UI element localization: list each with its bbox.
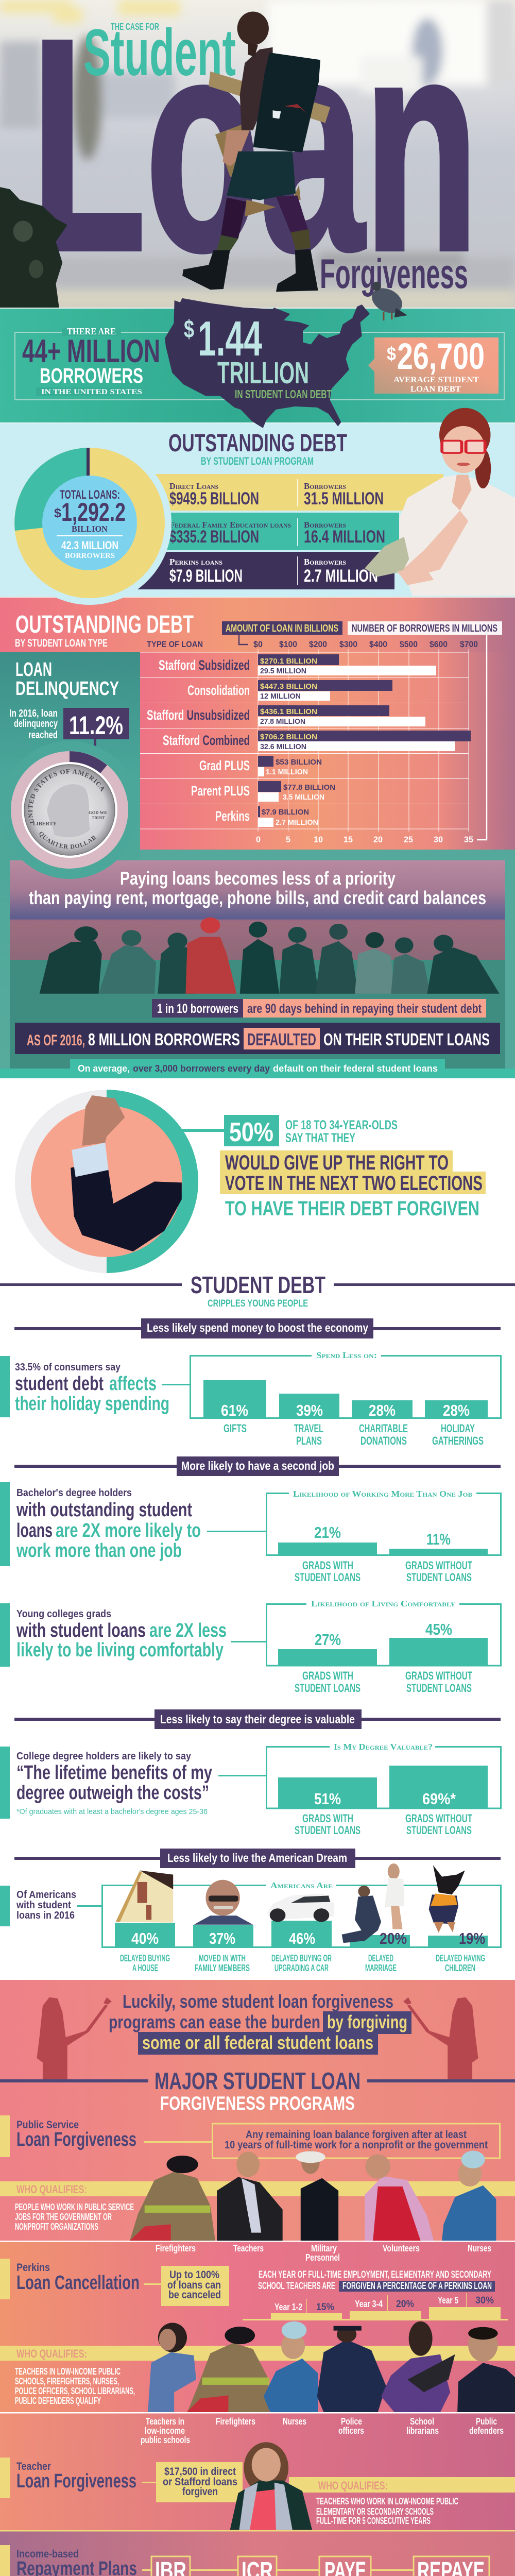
bottom axis bbox=[256, 835, 473, 844]
stat: borrowers: IN THE UNITED STATES bbox=[41, 388, 142, 396]
heading: outstanding debt by type: OUTSTANDING DEBT bbox=[15, 611, 194, 638]
photo: smiling teacher bbox=[230, 2442, 312, 2530]
heading: OUTSTANDING DEBT bbox=[168, 430, 347, 457]
text block: luckily some programs: some or all federal student loans bbox=[142, 2032, 373, 2053]
photo caption: Paying loans becomes less of a priority bbox=[120, 868, 396, 889]
panel: loan delinquency: reached bbox=[28, 730, 58, 741]
section: living comfortably: likely to be living comfortably bbox=[16, 1639, 224, 1661]
program: public service loan forgiveness: Nurses bbox=[468, 2243, 491, 2253]
plan: PAYE bbox=[317, 2556, 373, 2576]
callout: 8 million defaulted: DEFAULTED bbox=[247, 1030, 316, 1049]
chart: working more than one job: 21% bbox=[314, 1523, 341, 1541]
map: United States debt total: TRILLION bbox=[217, 356, 309, 390]
panel: forgiveness programs background bbox=[0, 1980, 515, 2576]
bar: direct loans: Borrowers bbox=[304, 481, 346, 491]
row: Perkins: $7.9 BILLION bbox=[262, 808, 309, 817]
chart: Americans are delaying: DELAYED bbox=[368, 1953, 393, 1963]
row: Parent PLUS: 3.5 MILLION bbox=[283, 793, 324, 802]
chart: donut total loans bbox=[8, 441, 171, 605]
photo: roadside bush bbox=[0, 187, 67, 308]
bar: perkins loans: 2.7 MILLION bbox=[304, 566, 378, 586]
chart: working more than one job: GRADS WITHOUT bbox=[405, 1559, 472, 1572]
program: public service loan forgiveness: Firefighters bbox=[156, 2243, 196, 2253]
program: teacher loan forgiveness: Loan Forgiveness bbox=[16, 2470, 136, 2492]
bar: federal family education loans: Federal Family Education loans bbox=[169, 520, 291, 530]
stat: 50% would give up voting bbox=[182, 1115, 486, 1220]
stat frame bbox=[15, 332, 504, 400]
section: American dream bbox=[0, 1849, 501, 1973]
chart: spend less on: PLANS bbox=[296, 1434, 322, 1447]
legend: AMOUNT OF LOAN IN BILLIONS bbox=[226, 623, 338, 634]
icon: quarter coin with ring: TRUST bbox=[92, 816, 106, 820]
section: American dream: with student bbox=[16, 1900, 71, 1911]
chart: working more than one job bbox=[267, 1489, 501, 1584]
row: Perkins bbox=[215, 806, 318, 827]
program: teacher loan forgiveness: Teacher bbox=[16, 2461, 51, 2472]
plan: ICR bbox=[225, 2556, 290, 2576]
section: second job bbox=[0, 1456, 501, 1584]
map: United States debt total: 1.44 bbox=[198, 311, 262, 366]
chart: is my degree valuable bbox=[267, 1742, 501, 1837]
icon: quarter coin with ring bbox=[11, 745, 128, 879]
panel: outstanding debt by program bbox=[0, 422, 515, 597]
program: public service loan forgiveness: JOBS FOR THE GOVERNMENT OR bbox=[15, 2212, 112, 2222]
chart: spend less on: 28% bbox=[443, 1401, 470, 1419]
program: Perkins loan cancellation: low-income bbox=[145, 2426, 185, 2436]
panel: loan delinquency: In 2016, loan bbox=[9, 708, 58, 719]
photo: older man bbox=[194, 1880, 253, 1925]
chart: Americans are delaying: DELAYED BUYING OR bbox=[271, 1953, 332, 1963]
chart: spend less on: TRAVEL bbox=[294, 1422, 323, 1435]
stat: borrowers bbox=[22, 326, 160, 396]
bar: federal family education loans: Borrowers bbox=[304, 520, 346, 530]
callout: 1 in 10 borrowers bbox=[152, 999, 486, 1018]
section: degree value bbox=[0, 1709, 501, 1837]
heading: outstanding debt by type bbox=[15, 611, 194, 649]
chart: living comfortably: Likelihood of Living Comfortably bbox=[311, 1599, 455, 1608]
program: teacher loan forgiveness: or Stafford loans bbox=[163, 2476, 237, 2488]
program: Perkins loan cancellation: Teachers in bbox=[146, 2416, 184, 2427]
program: income-based repayment plans: Income-based bbox=[16, 2548, 79, 2560]
section: second job: More likely to have a second job bbox=[181, 1459, 334, 1472]
chart: donut total loans: $ bbox=[54, 506, 61, 520]
chart: living comfortably: GRADS WITHOUT bbox=[405, 1669, 472, 1682]
row: Stafford Unsubsidized: 27.8 MILLION bbox=[260, 717, 305, 726]
chart: living comfortably: 27% bbox=[315, 1631, 341, 1649]
callout: 3,000 borrowers every day bbox=[0, 1059, 515, 1078]
plan: REPAYE bbox=[414, 2556, 489, 2576]
row: Stafford Combined: $706.2 BILLION bbox=[260, 733, 317, 741]
row: Stafford Combined bbox=[163, 731, 471, 751]
photo: woman holding cash bbox=[365, 408, 515, 596]
stat: average debt: $ bbox=[387, 343, 396, 364]
bottom axis: 0 bbox=[256, 835, 261, 844]
bottom axis: 15 bbox=[344, 835, 353, 844]
program: Perkins loan cancellation: public schools bbox=[141, 2435, 190, 2445]
map: United States debt total: $ bbox=[184, 316, 194, 343]
hero: title photo panel bbox=[0, 0, 515, 309]
chart: is my degree valuable: 69%* bbox=[422, 1790, 456, 1808]
program: teacher loan forgiveness: ELEMENTARY OR SECONDARY SCHOOLS bbox=[316, 2506, 434, 2517]
bar: perkins loans bbox=[127, 552, 394, 589]
panel: national debt stats bbox=[0, 308, 515, 422]
chart: living comfortably: STUDENT LOANS bbox=[295, 1682, 360, 1694]
section: holiday spending bbox=[0, 1318, 501, 1447]
program: public service loan forgiveness: WHO QUALIFIES: bbox=[16, 2183, 87, 2196]
row: Grad PLUS: 1.1 MILLION bbox=[266, 768, 308, 776]
program: Perkins loan cancellation: SCHOOL TEACHERS ARE bbox=[258, 2281, 335, 2292]
bottom axis: 5 bbox=[286, 835, 290, 844]
callout: 3,000 borrowers every day: over 3,000 borrowers every day bbox=[133, 1063, 270, 1074]
section: degree value: degree outweigh the costs” bbox=[16, 1782, 209, 1804]
chart: Americans are delaying: 20% bbox=[380, 1929, 407, 1947]
section: holiday spending: affects bbox=[109, 1373, 157, 1395]
bottom axis: 10 bbox=[314, 835, 323, 844]
chart: donut total loans: BORROWERS bbox=[65, 552, 115, 560]
callout: 3,000 borrowers every day: default on their federal student loans bbox=[273, 1063, 438, 1074]
chart: donut total loans: TOTAL LOANS: bbox=[60, 488, 120, 502]
chart: working more than one job: Likelihood of Working More Than One Job bbox=[293, 1489, 472, 1499]
icon: quarter coin with ring: UNITED STATES OF AMERICA bbox=[28, 769, 104, 824]
program: public service loan forgiveness: Personnel bbox=[305, 2252, 340, 2263]
bar: federal family education loans bbox=[164, 513, 399, 550]
heading: student debt cripples young people: STUDENT DEBT bbox=[191, 1272, 325, 1298]
program: Perkins loan cancellation: Nurses bbox=[283, 2416, 306, 2427]
chart: working more than one job: STUDENT LOANS bbox=[406, 1571, 472, 1584]
row: Consolidation: 12 MILLION bbox=[260, 692, 301, 701]
stat: average debt: 26,700 bbox=[397, 336, 485, 377]
chart: is my degree valuable: STUDENT LOANS bbox=[406, 1824, 472, 1837]
plan: IBR bbox=[141, 2556, 200, 2576]
photo: white SUV bbox=[267, 1893, 334, 1922]
section: living comfortably bbox=[0, 1599, 501, 1694]
callout: 8 million defaulted: AS OF 2016, bbox=[27, 1032, 85, 1049]
row: Grad PLUS bbox=[199, 756, 322, 776]
program: Perkins loan cancellation: TEACHERS IN LOW-INCOME PUBLIC bbox=[15, 2366, 121, 2377]
row: Stafford Unsubsidized: Stafford Unsubsidized bbox=[147, 707, 250, 723]
icon: pigeon bbox=[366, 282, 408, 320]
chart: is my degree valuable: 51% bbox=[314, 1790, 341, 1808]
section: living comfortably: with student loans bbox=[16, 1620, 146, 1641]
chart: loan type bars: $300 bbox=[339, 639, 357, 649]
section: living comfortably: are 2X less bbox=[149, 1620, 227, 1641]
bottom axis: 25 bbox=[404, 835, 413, 844]
program: Perkins loan cancellation bbox=[0, 2259, 515, 2445]
bar: federal family education loans: $335.2 BILLION bbox=[169, 527, 259, 547]
row: Stafford Unsubsidized: $436.1 BILLION bbox=[260, 707, 317, 716]
program: public service loan forgiveness: Loan Forgiveness bbox=[16, 2129, 136, 2150]
chart: Americans are delaying: 40% bbox=[131, 1929, 159, 1947]
section: holiday spending: their holiday spending bbox=[15, 1393, 169, 1415]
icon: quarter coin with ring: GOD WE bbox=[89, 810, 107, 815]
row: Stafford Subsidized: $270.1 BILLION bbox=[260, 657, 317, 666]
chart: loan type bars: $600 bbox=[430, 639, 448, 649]
program: Perkins loan cancellation: PUBLIC DEFENDERS QUALIFY bbox=[15, 2396, 101, 2406]
chart: Americans are delaying: DELAYED BUYING bbox=[120, 1953, 170, 1963]
section: American dream: Of Americans bbox=[16, 1889, 76, 1901]
program: Perkins loan cancellation: Loan Cancellation bbox=[16, 2272, 140, 2294]
program: Perkins loan cancellation: WHO QUALIFIES: bbox=[16, 2347, 87, 2360]
program: Perkins loan cancellation: officers bbox=[338, 2426, 364, 2436]
row: Consolidation: $447.3 BILLION bbox=[260, 682, 317, 691]
chart: loan type bars: TYPE OF LOAN bbox=[147, 639, 203, 649]
program: income-based repayment plans bbox=[0, 2545, 489, 2576]
row: Parent PLUS: Parent PLUS bbox=[191, 783, 250, 799]
heading: major student loan forgiveness programs: FORGIVENESS PROGRAMS bbox=[160, 2093, 355, 2114]
chart: Americans are delaying: A HOUSE bbox=[132, 1963, 158, 1973]
program: Perkins loan cancellation: SCHOOLS, FIREFIGHTERS, NURSES, bbox=[15, 2376, 119, 2386]
program: Perkins loan cancellation: School bbox=[410, 2416, 434, 2427]
chart: is my degree valuable: GRADS WITHOUT bbox=[405, 1812, 472, 1825]
title word: The case for: THE CASE FOR bbox=[111, 22, 159, 32]
section: second job: work more than one job bbox=[16, 1540, 182, 1562]
stat: 50% would give up voting: SAY THAT THEY bbox=[285, 1131, 355, 1145]
icon: quarter coin with ring: LIBERTY bbox=[33, 821, 57, 827]
chart: spend less on: GIFTS bbox=[224, 1422, 247, 1435]
chart: Americans are delaying: UPGRADING A CAR bbox=[274, 1963, 329, 1973]
section: second job: are 2X more likely to bbox=[56, 1520, 201, 1541]
program: teacher loan forgiveness bbox=[0, 2442, 515, 2530]
map: United States debt total: IN STUDENT LOAN DEBT bbox=[235, 387, 332, 401]
photo: public service workers bbox=[130, 2151, 496, 2241]
text block: luckily some programs: programs can ease the burden bbox=[109, 2011, 320, 2032]
panel: loan delinquency: 11.2% bbox=[69, 711, 123, 740]
map: United States debt total bbox=[165, 298, 370, 428]
chart: Americans are delaying: MARRIAGE bbox=[365, 1963, 397, 1973]
heading: student debt cripples young people: CRIPPLES YOUNG PEOPLE bbox=[208, 1298, 308, 1309]
chart: spend less on: GATHERINGS bbox=[432, 1434, 484, 1447]
program: public service loan forgiveness: Teachers bbox=[233, 2243, 264, 2253]
chart: Americans are delaying: CHILDREN bbox=[445, 1963, 475, 1973]
heading: student debt cripples young people bbox=[0, 1272, 515, 1309]
program: public service loan forgiveness: NONPROFIT ORGANIZATIONS bbox=[15, 2222, 98, 2232]
bar: direct loans: $949.5 BILLION bbox=[169, 489, 259, 509]
chart: Americans are delaying: Americans Are bbox=[270, 1880, 333, 1890]
chart: Perkins percent steps: Year 3-4 bbox=[355, 2299, 383, 2309]
callout: 8 million defaulted: 8 MILLION BORROWERS bbox=[88, 1030, 240, 1049]
program: public service loan forgiveness: Military bbox=[311, 2243, 337, 2253]
section: living comfortably: Young colleges grads bbox=[16, 1608, 111, 1620]
row: Stafford Subsidized: 29.5 MILLION bbox=[260, 667, 306, 675]
panel: loan delinquency: DELINQUENCY bbox=[15, 678, 119, 700]
chart: loan type bars bbox=[140, 639, 478, 844]
photo: eligible workers bbox=[148, 2321, 515, 2412]
row: Stafford Combined: 32.6 MILLION bbox=[260, 742, 306, 751]
chart: Perkins percent steps: 20% bbox=[396, 2299, 414, 2310]
chart: Perkins percent steps: 15% bbox=[316, 2302, 334, 2313]
program: Perkins loan cancellation: defenders bbox=[469, 2426, 504, 2436]
stat: borrowers: BORROWERS bbox=[40, 364, 143, 387]
bar: direct loans: Direct Loans bbox=[169, 481, 218, 491]
chart: loan type bars: $0 bbox=[253, 639, 263, 649]
bottom axis: 20 bbox=[373, 835, 383, 844]
chart: loan type bars: $500 bbox=[400, 639, 418, 649]
program: public service loan forgiveness: Public Service bbox=[16, 2119, 79, 2131]
chart: Americans are delaying: 19% bbox=[459, 1929, 485, 1947]
program: public service loan forgiveness: PEOPLE WHO WORK IN PUBLIC SERVICE bbox=[15, 2202, 134, 2212]
bar: direct loans bbox=[145, 474, 443, 511]
stat: average debt: LOAN DEBT bbox=[410, 385, 461, 394]
row: Consolidation: Consolidation bbox=[187, 683, 250, 698]
photo: walking student with backpack bbox=[182, 11, 330, 292]
row: Parent PLUS bbox=[191, 781, 335, 802]
program: Perkins loan cancellation: of loans can bbox=[167, 2279, 221, 2291]
program: teacher loan forgiveness: forgiven bbox=[182, 2486, 218, 2498]
stat: borrowers: 44+ MILLION bbox=[22, 333, 160, 369]
stat: 50% would give up voting: OF 18 TO 34-YEAR-OLDS bbox=[285, 1118, 398, 1132]
chart: Americans are delaying: MOVED IN WITH bbox=[199, 1953, 246, 1963]
panel: loan delinquency: LOAN bbox=[15, 659, 52, 681]
bar: perkins loans: Perkins loans bbox=[169, 557, 222, 567]
program: Perkins loan cancellation: Perkins bbox=[16, 2262, 50, 2274]
chart: loan type bars: $100 bbox=[279, 639, 297, 649]
program: public service loan forgiveness: Any remaining loan balance forgiven after at least bbox=[246, 2129, 467, 2141]
chart: loan type bars: $200 bbox=[309, 639, 327, 649]
program: teacher loan forgiveness: WHO QUALIFIES: bbox=[318, 2479, 388, 2492]
panel: loan delinquency: delinquency bbox=[14, 718, 58, 730]
chart: loan type bars: $400 bbox=[369, 639, 387, 649]
chart: spend less on: HOLIDAY bbox=[441, 1422, 475, 1435]
program: Perkins loan cancellation: Police bbox=[341, 2416, 362, 2427]
text block: luckily some programs: Luckily, some student loan forgiveness bbox=[123, 1991, 393, 2012]
row: Stafford Subsidized bbox=[159, 654, 436, 675]
chart: donut total loans: 1,292.2 bbox=[61, 498, 126, 527]
chart: living comfortably: GRADS WITH bbox=[302, 1669, 353, 1682]
program: Perkins loan cancellation: librarians bbox=[406, 2426, 439, 2436]
program: Perkins loan cancellation: POLICE OFFICERS, SCHOOL LIBRARIANS, bbox=[15, 2386, 135, 2396]
section: second job: loans bbox=[16, 1520, 53, 1541]
section: second job: Bachelor's degree holders bbox=[16, 1487, 132, 1499]
program: Perkins loan cancellation: Up to 100% bbox=[169, 2269, 219, 2281]
row: Consolidation bbox=[187, 680, 392, 701]
program: public service loan forgiveness: Volunteers bbox=[383, 2243, 420, 2253]
bar: federal family education loans: 16.4 MILLION bbox=[304, 527, 385, 547]
bar: direct loans: 31.5 MILLION bbox=[304, 489, 384, 509]
chart: is my degree valuable: STUDENT LOANS bbox=[295, 1824, 360, 1837]
program: teacher loan forgiveness: FULL-TIME FOR 5 CONSECUTIVE YEARS bbox=[316, 2516, 431, 2526]
panel: loan delinquency bbox=[9, 659, 129, 879]
chart: Americans are delaying: 37% bbox=[209, 1929, 235, 1947]
bottom axis: 30 bbox=[434, 835, 443, 844]
heading: major student loan forgiveness programs: MAJOR STUDENT LOAN bbox=[154, 2067, 360, 2094]
chart: Perkins percent steps bbox=[243, 2293, 508, 2320]
section: American dream: loans in 2016 bbox=[16, 1910, 75, 1921]
icon: quarter coin with ring: QUARTER DOLLAR bbox=[39, 832, 97, 849]
program: Perkins loan cancellation: Public bbox=[476, 2416, 497, 2427]
bottom axis: 35 bbox=[464, 835, 473, 844]
row: Grad PLUS: Grad PLUS bbox=[199, 758, 250, 773]
photo panel: friends on a beach bbox=[10, 860, 505, 1069]
chart: spend less on: DONATIONS bbox=[360, 1434, 407, 1447]
stat: 50% would give up voting: 50% bbox=[229, 1117, 273, 1147]
chart: spend less on: CHARITABLE bbox=[359, 1422, 408, 1435]
chart: Americans are delaying: DELAYED HAVING bbox=[436, 1953, 485, 1963]
photo: proposal couple bbox=[342, 1863, 404, 1943]
row: Parent PLUS: $77.8 BILLION bbox=[283, 783, 335, 792]
callout: 3,000 borrowers every day: On average, bbox=[78, 1063, 130, 1074]
chart: spend less on: 61% bbox=[221, 1401, 248, 1419]
stat: average debt: AVERAGE STUDENT bbox=[393, 376, 479, 384]
program: teacher loan forgiveness: $17,500 in direct bbox=[164, 2466, 236, 2478]
section: degree value: College degree holders are likely to say bbox=[16, 1751, 192, 1762]
row: Stafford Combined: Stafford Combined bbox=[163, 733, 250, 748]
chart: Americans are delaying: FAMILY MEMBERS bbox=[195, 1963, 250, 1973]
row: Perkins: Perkins bbox=[215, 808, 250, 824]
section: holiday spending: student debt bbox=[15, 1373, 104, 1395]
program: Perkins loan cancellation: Firefighters bbox=[216, 2416, 255, 2427]
heading: major student loan forgiveness programs bbox=[0, 2067, 515, 2114]
section: second job: with outstanding student bbox=[16, 1499, 192, 1521]
chart: 50% raised fist ring bbox=[15, 1090, 198, 1273]
chart: is my degree valuable: Is My Degree Valuable? bbox=[334, 1742, 433, 1752]
chart: Perkins percent steps: Year 1-2 bbox=[274, 2302, 302, 2312]
chart: spend less on: 39% bbox=[296, 1401, 323, 1419]
chart: working more than one job: GRADS WITH bbox=[302, 1559, 353, 1572]
section: holiday spending: Less likely spend money to boost the economy bbox=[147, 1321, 368, 1334]
section: holiday spending: 33.5% of consumers say bbox=[15, 1362, 121, 1373]
row: Grad PLUS: $53 BILLION bbox=[276, 758, 322, 767]
stat: borrowers: THERE ARE bbox=[67, 326, 116, 336]
bar: perkins loans: Borrowers bbox=[304, 557, 346, 567]
program: Perkins loan cancellation: be canceled bbox=[168, 2289, 221, 2301]
chart: Perkins percent steps: 30% bbox=[475, 2295, 494, 2306]
section: degree value: “The lifetime benefits of my bbox=[16, 1762, 212, 1784]
icon: fairy silhouettes with wands bbox=[37, 1997, 478, 2079]
heading: outstanding debt by type: BY STUDENT LOAN TYPE bbox=[15, 637, 108, 649]
section: degree value: *Of graduates with at least a bachelor's degree ages 25-36 bbox=[16, 1807, 208, 1816]
text block: luckily some programs bbox=[109, 1991, 411, 2055]
chart: working more than one job: STUDENT LOANS bbox=[295, 1571, 360, 1584]
callout: 8 million defaulted bbox=[15, 1023, 500, 1054]
bar: perkins loans: $7.9 BILLION bbox=[169, 566, 243, 586]
title word: Student: Student bbox=[83, 16, 236, 90]
photo: small dog bbox=[429, 1865, 465, 1933]
legend bbox=[222, 621, 502, 840]
chart: loan type bars: $700 bbox=[460, 639, 478, 649]
chart: donut total loans: BILLION bbox=[72, 524, 108, 534]
callout: 1 in 10 borrowers: 1 in 10 borrowers bbox=[157, 1002, 238, 1016]
chart: spend less on: 28% bbox=[369, 1401, 396, 1419]
chart: Americans are delaying bbox=[102, 1863, 501, 1973]
chart: donut total loans: 42.3 MILLION bbox=[61, 539, 118, 552]
row: Perkins: 2.7 MILLION bbox=[276, 818, 318, 827]
row: Stafford Subsidized: Stafford Subsidized bbox=[159, 657, 250, 673]
chart: living comfortably: STUDENT LOANS bbox=[406, 1682, 472, 1694]
chart: spend less on bbox=[191, 1350, 501, 1447]
stat: average debt bbox=[368, 336, 499, 394]
chart: living comfortably: 45% bbox=[425, 1620, 452, 1638]
photo: house bbox=[116, 1870, 173, 1923]
subheading: BY STUDENT LOAN PROGRAM bbox=[201, 455, 314, 467]
chart: is my degree valuable: GRADS WITH bbox=[302, 1812, 353, 1825]
chart: Perkins percent steps: Year 5 bbox=[438, 2295, 458, 2306]
row: Stafford Unsubsidized bbox=[147, 705, 425, 726]
program: public service loan forgiveness bbox=[0, 2115, 515, 2263]
section: American dream: Less likely to live the American Dream bbox=[167, 1851, 347, 1865]
text block: luckily some programs: by forgiving bbox=[327, 2011, 407, 2032]
section: degree value: Less likely to say their degree is valuable bbox=[160, 1713, 355, 1726]
chart: living comfortably bbox=[267, 1599, 501, 1694]
panel: outstanding debt by type bbox=[0, 597, 515, 1069]
chart: Americans are delaying: 46% bbox=[289, 1929, 315, 1947]
chart: spend less on: Spend Less on: bbox=[316, 1350, 377, 1360]
chart: working more than one job: 11% bbox=[426, 1530, 451, 1548]
